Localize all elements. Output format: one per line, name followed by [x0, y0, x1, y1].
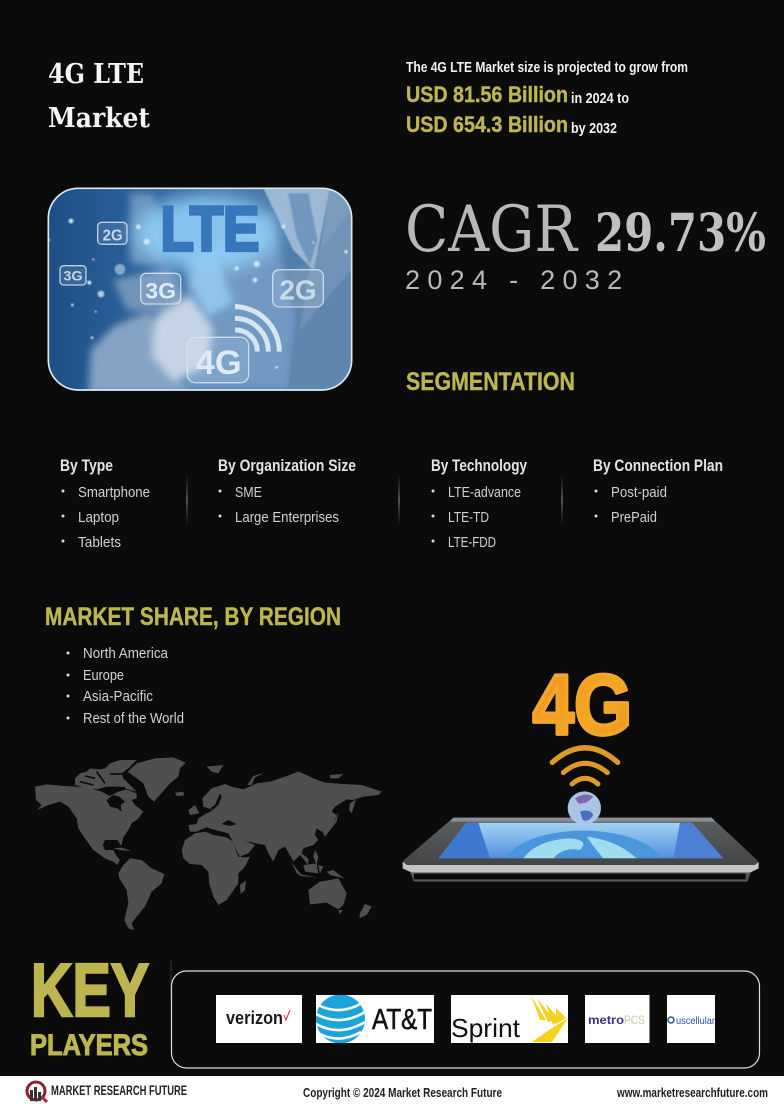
market size projection text: USD 654.3 Billion — [406, 112, 568, 137]
americas and greenland — [35, 757, 186, 930]
LTE photo: 3G — [145, 278, 176, 303]
market size projection text: by 2032 — [571, 121, 617, 137]
market size projection text: The 4G LTE Market size is projected to grow from — [406, 60, 688, 76]
footer logo — [27, 1082, 47, 1102]
logo: Sprint — [451, 995, 568, 1043]
tablet screen — [438, 822, 724, 858]
market size projection text: in 2024 to — [571, 91, 629, 107]
title: 4G LTE — [48, 59, 144, 90]
footer: MARKET RESEARCH FUTURE — [51, 1083, 187, 1098]
segmentation: by organization size: Large Enterprises — [235, 509, 339, 526]
region list: Europe — [83, 668, 124, 684]
segmentation: by connection plan: Post-paid — [611, 484, 667, 501]
segmentation: by type — [60, 456, 150, 551]
title: Market — [48, 103, 150, 134]
title — [48, 59, 150, 134]
logo: verizon: verizon — [226, 1008, 283, 1028]
logo: AT&T: AT&T — [372, 1004, 432, 1036]
market size projection text: USD 81.56 Billion — [406, 82, 568, 107]
key players heading — [30, 948, 149, 1062]
LTE photo — [48, 188, 352, 393]
LTE lettering: LTE — [161, 194, 259, 264]
suit jacket — [290, 265, 318, 389]
4G tablet illustration — [402, 672, 759, 882]
logo: uscellular: uscellular — [676, 1015, 715, 1027]
region list: Rest of the World — [83, 711, 184, 727]
segmentation: by organization size — [218, 456, 356, 526]
segmentation: by technology: LTE-advance — [448, 484, 521, 501]
key players heading: KEY — [31, 948, 149, 1032]
logo: AT&T — [316, 994, 434, 1044]
segmentation: by technology: LTE-TD — [448, 509, 489, 526]
hand — [152, 297, 213, 382]
segmentation: by technology: By Technology — [431, 456, 527, 475]
logo: metroPCS: metro — [588, 1013, 624, 1027]
tie and collar — [263, 188, 330, 270]
globe — [568, 791, 601, 825]
region list — [66, 646, 184, 727]
segmentation: by connection plan — [593, 456, 723, 526]
CAGR figures: CAGR — [405, 193, 579, 267]
segmentation: by type: By Type — [60, 456, 113, 475]
segmentation: by connection plan: By Connection Plan — [593, 456, 723, 475]
region list: North America — [83, 646, 169, 662]
CAGR figures — [405, 193, 766, 295]
LTE photo: 3G — [63, 268, 83, 284]
segmentation: by type: Laptop — [78, 509, 119, 526]
LTE photo: 2G — [279, 274, 317, 305]
sleeve — [88, 310, 190, 393]
logo: metroPCS — [585, 995, 650, 1043]
region list: Asia-Pacific — [83, 689, 153, 705]
logo: Sprint: Sprint — [451, 1013, 521, 1043]
sparkles — [48, 219, 348, 369]
segmentation: by type: Smartphone — [78, 484, 150, 501]
logo: verizon — [216, 995, 302, 1043]
CAGR figures: 2024 - 2032 — [405, 265, 629, 295]
shirt — [183, 213, 297, 390]
segmentation: by connection plan: PrePaid — [611, 509, 657, 526]
badges — [60, 222, 323, 383]
segmentation: by organization size: SME — [235, 484, 262, 501]
4G lettering: 4G — [533, 658, 632, 753]
tablet body — [403, 818, 758, 865]
segmentation: by technology — [431, 456, 527, 551]
logo: metroPCS: PCS — [624, 1013, 645, 1027]
LTE photo: 4G — [196, 344, 242, 382]
signal arcs — [552, 748, 618, 784]
key players heading: PLAYERS — [30, 1029, 148, 1062]
market share heading: MARKET SHARE, BY REGION — [45, 603, 341, 631]
wifi arcs — [235, 307, 279, 352]
footer: Copyright © 2024 Market Research Future — [303, 1085, 502, 1100]
segmentation: by technology: LTE-FDD — [448, 534, 496, 551]
segmentation: by type: Tablets — [78, 534, 121, 551]
segmentation heading: SEGMENTATION — [406, 368, 575, 396]
key players panel — [172, 971, 760, 1068]
europe, asia, africa and oceania — [182, 765, 382, 918]
footer — [0, 1076, 784, 1108]
market size projection text — [406, 60, 688, 137]
glow — [135, 195, 278, 272]
logo: uscellular — [667, 995, 715, 1043]
segmentation: by organization size: By Organization Size — [218, 456, 356, 475]
world map — [35, 757, 382, 930]
LTE photo: 2G — [103, 228, 123, 245]
